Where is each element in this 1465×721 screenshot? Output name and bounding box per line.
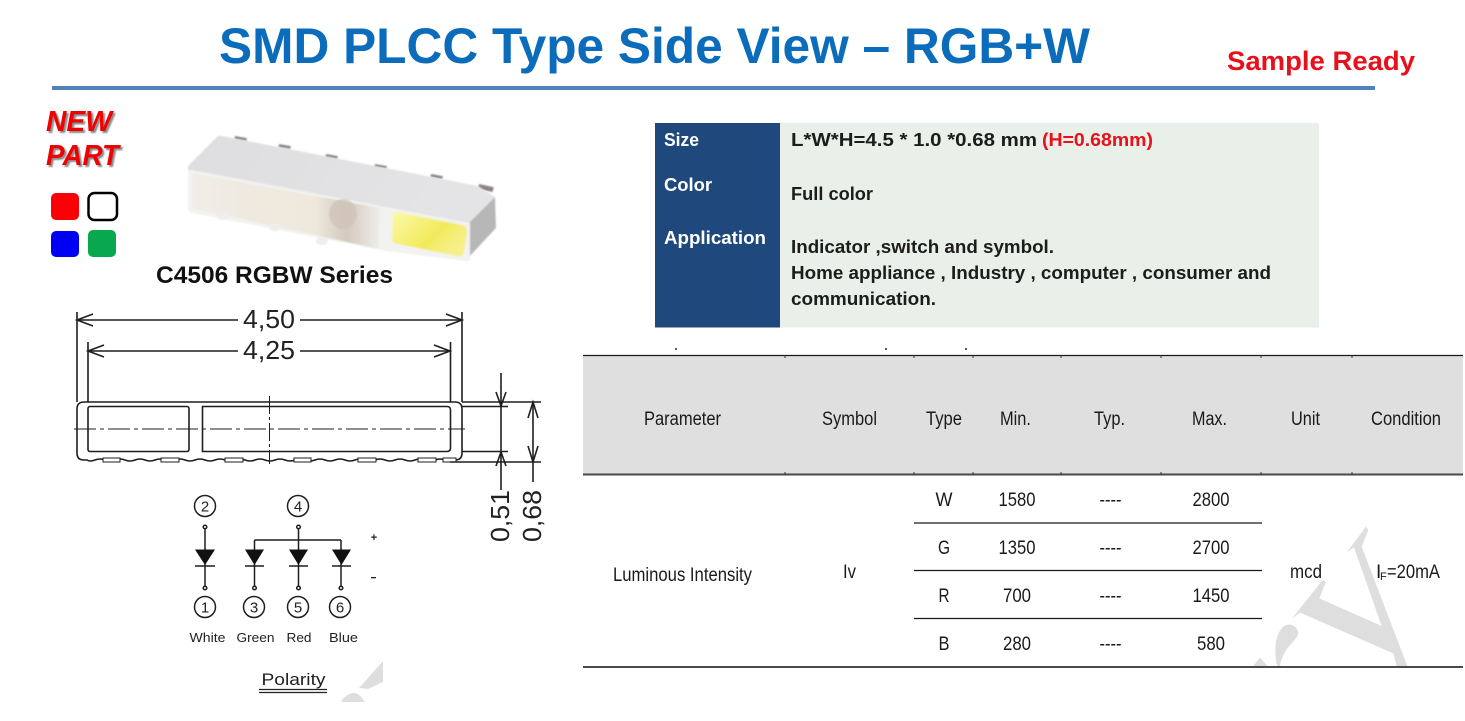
new part label: [46, 106, 123, 174]
row R: ----: [1100, 586, 1122, 607]
row W: 2800: [1192, 490, 1230, 511]
merged cells: Luminous Intensity: [613, 565, 752, 586]
height dimensions: [450, 373, 547, 542]
polarity diagram: 2: [201, 498, 209, 516]
polarity diagram: 1: [201, 600, 209, 616]
polarity diagram: [190, 496, 377, 692]
row B: 280: [1003, 634, 1031, 655]
polarity diagram: White: [190, 630, 226, 645]
merged cells: [613, 562, 1440, 586]
width dimensions: 4,50: [243, 304, 295, 334]
merged cells: I: [1376, 562, 1381, 583]
row B: ----: [1100, 634, 1122, 655]
row B: B: [938, 634, 950, 655]
width dimensions: [77, 304, 462, 402]
spec labels: Size: [664, 130, 699, 150]
table header: [644, 409, 1441, 430]
product photo: LED package: [188, 136, 496, 261]
row R: 1450: [1192, 586, 1230, 607]
table header: Type: [926, 409, 962, 430]
spec values: Indicator ,switch and symbol.: [791, 237, 1054, 257]
row G: ----: [1100, 538, 1122, 559]
polarity diagram: 3: [250, 600, 258, 616]
package outline: [74, 396, 465, 464]
polarity diagram: 6: [336, 600, 344, 616]
row G: 2700: [1192, 538, 1230, 559]
row G: [938, 538, 1230, 559]
row W: [936, 490, 1230, 511]
table header: Condition: [1371, 409, 1441, 430]
new part label: NEW: [48, 108, 117, 140]
watermark: lower right fragment: [1253, 527, 1407, 666]
merged cells: mcd: [1290, 562, 1322, 583]
row R: R: [938, 586, 950, 607]
title: SMD PLCC Type Side View – RGB+W: [219, 18, 1091, 74]
new part label: NEW: [46, 106, 115, 138]
table header: Max.: [1192, 409, 1227, 430]
polarity diagram: 4: [294, 498, 302, 516]
row W: W: [936, 490, 953, 511]
spec labels: Application: [664, 228, 766, 248]
width dimensions: 4,25: [243, 335, 295, 365]
table header: Typ.: [1094, 409, 1125, 430]
spec labels: Color: [664, 175, 712, 195]
spec values: Home appliance , Industry , computer , consumer and: [791, 263, 1271, 283]
table header: Symbol: [822, 409, 877, 430]
row R: 700: [1003, 586, 1031, 607]
spec values: Full color: [791, 184, 873, 204]
row G: 1350: [998, 538, 1036, 559]
polarity diagram: Blue: [329, 630, 358, 645]
table header: Unit: [1291, 409, 1321, 430]
table header: Min.: [1000, 409, 1031, 430]
row B: [938, 634, 1225, 655]
polarity diagram: Green: [236, 630, 274, 645]
spec values: communication.: [791, 289, 936, 309]
new part label: PART: [48, 142, 123, 174]
row R: [938, 586, 1230, 607]
spec labels: [664, 130, 766, 248]
spec values: (H=0.68mm): [1042, 130, 1153, 150]
merged cells: Iv: [843, 562, 856, 583]
specification panel: [655, 123, 1319, 328]
new part label: PART: [46, 140, 121, 172]
colour swatches: [51, 193, 117, 257]
polarity diagram: Red: [286, 630, 312, 645]
watermark: lower left fragment: [341, 661, 383, 702]
row G: G: [938, 538, 950, 559]
spec values: [791, 130, 1271, 309]
polarity diagram: +: [371, 532, 377, 544]
row W: 1580: [998, 490, 1036, 511]
spec values: L*W*H=4.5 * 1.0 *0.68 mm: [791, 130, 1037, 150]
polarity diagram: 5: [294, 600, 302, 616]
luminous intensity table: [583, 348, 1463, 667]
merged cells: F: [1380, 571, 1387, 583]
sample ready badge: Sample Ready: [1227, 46, 1415, 76]
height dimensions: 0,51: [485, 490, 515, 542]
row W: ----: [1100, 490, 1122, 511]
row B: 580: [1197, 634, 1225, 655]
product name: C4506 RGBW Series: [156, 262, 393, 289]
title divider: [52, 86, 1375, 90]
polarity diagram: Polarity: [262, 670, 326, 689]
merged cells: =20mA: [1387, 562, 1440, 583]
table header: Parameter: [644, 409, 722, 430]
dimension drawing: [74, 304, 547, 542]
height dimensions: 0,68: [517, 490, 547, 542]
